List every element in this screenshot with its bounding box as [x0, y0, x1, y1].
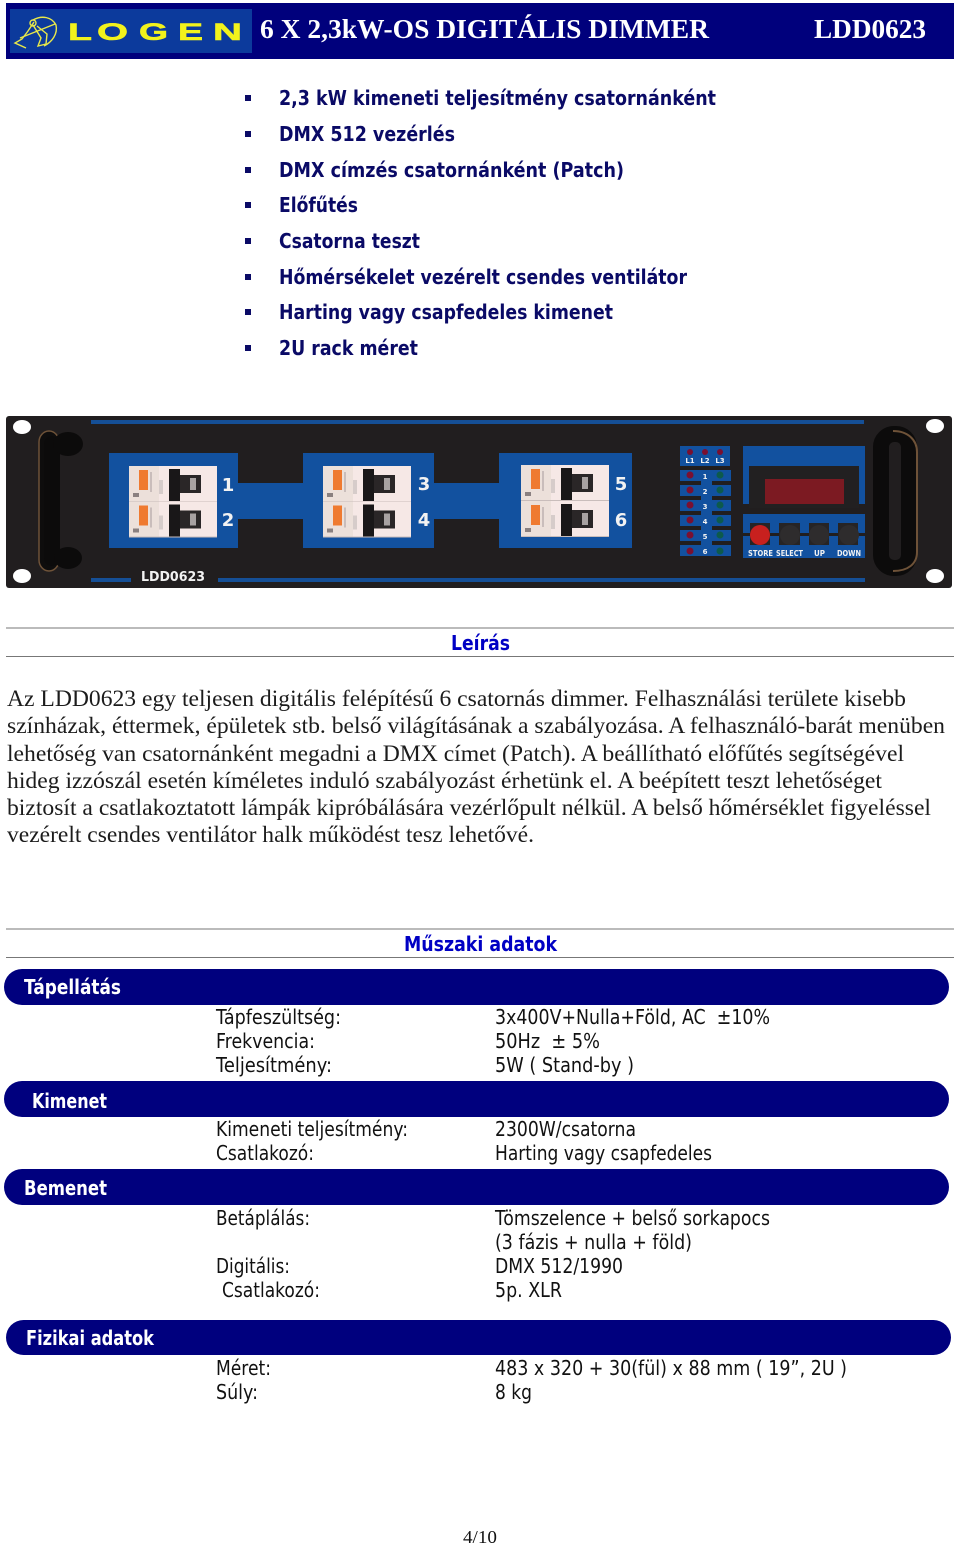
- section: description: [6, 628, 954, 847]
- control buttons: UP: [814, 549, 825, 558]
- product photo: dimmer front panel: [6, 416, 952, 588]
- spec group: input: Digitális:: [216, 1254, 290, 1278]
- spec group: input: [4, 1169, 949, 1302]
- spec group: output: [4, 1081, 949, 1165]
- spec group: power supply: Frekvencia:: [216, 1029, 315, 1053]
- spec group: output: Csatlakozó:: [216, 1141, 314, 1165]
- spec group: physical data: Súly:: [216, 1380, 258, 1404]
- spec group: output: Harting vagy csapfedeles: [495, 1141, 712, 1165]
- feature list: 2U rack méret: [279, 336, 418, 360]
- control buttons: [743, 514, 865, 558]
- LED indicators: L2: [700, 457, 710, 465]
- feature list: Hőmérsékelet vezérelt csendes ventilátor: [279, 265, 687, 289]
- spec group: power supply: [4, 969, 949, 1077]
- spec group: power supply: Teljesítmény:: [215, 1053, 332, 1077]
- feature list: [245, 86, 716, 360]
- channel numbers: 2: [222, 510, 234, 531]
- spec group: physical data: Méret:: [216, 1356, 271, 1380]
- control buttons: DOWN: [837, 549, 861, 558]
- feature list: Csatorna teszt: [279, 229, 420, 253]
- spec group: power supply: 5W ( Stand-by ): [495, 1053, 634, 1077]
- feature list: DMX 512 vezérlés: [279, 122, 455, 146]
- left handle: [39, 431, 83, 571]
- LED indicators: 5: [703, 533, 708, 541]
- model code: LDD0623: [814, 14, 926, 44]
- feature list: DMX címzés csatornánként (Patch): [279, 158, 624, 182]
- control buttons: SELECT: [776, 549, 803, 558]
- LED indicators: L1: [685, 457, 695, 465]
- spec group: input: Csatlakozó:: [222, 1278, 320, 1302]
- title: 6 X 2,3kW-OS DIGITÁLIS DIMMER: [260, 14, 710, 44]
- circuit breakers: [129, 465, 609, 538]
- spec group: power supply: Tápfeszültség:: [215, 1005, 341, 1029]
- description paragraph: Az LDD0623 egy teljesen digitális felépítésű 6 csatornás dimmer. Felhasználási területe kisebb: [7, 686, 906, 711]
- wordmark: N: [213, 19, 242, 46]
- blue stripes: [91, 420, 865, 582]
- wordmark: O: [97, 19, 128, 46]
- channel numbers: 3: [418, 474, 430, 495]
- wordmark: E: [178, 19, 203, 46]
- LED display: [743, 446, 865, 508]
- section: technical data heading: Műszaki adatok: [404, 932, 558, 956]
- logo: [10, 9, 252, 53]
- wordmark: [68, 19, 242, 46]
- spec group: output: 2300W/csatorna: [495, 1117, 636, 1141]
- spec group: physical data: Fizikai adatok: [26, 1326, 155, 1350]
- LED indicators: 2: [703, 488, 708, 496]
- model label: LDD0623: [141, 570, 205, 585]
- LED indicators: 6: [703, 548, 708, 556]
- heading: Leírás: [451, 631, 510, 655]
- channel numbers: 5: [615, 474, 627, 495]
- feature list: 2,3 kW kimeneti teljesítmény csatornánként: [279, 86, 716, 110]
- spec group: input: Bemenet: [24, 1176, 107, 1200]
- spec group: input: Tömszelence + belső sorkapocs: [494, 1206, 770, 1230]
- LED indicators: L3: [715, 457, 725, 465]
- LED indicators: [680, 446, 731, 556]
- spec group: physical data: 8 kg: [495, 1380, 532, 1404]
- description paragraph: [7, 686, 945, 847]
- spec group: output: Kimenet: [32, 1089, 107, 1113]
- spec group: physical data: 483 x 320 + 30(fül) x 88 mm ( 19”, 2U ): [495, 1356, 847, 1380]
- feature list: Előfűtés: [279, 193, 358, 217]
- channel numbers: 6: [615, 510, 627, 531]
- spec group: power supply: Tápellátás: [24, 975, 121, 999]
- blue breaker field: [109, 453, 632, 548]
- channel numbers: 1: [222, 475, 234, 496]
- channel numbers: 4: [418, 510, 430, 531]
- description paragraph: biztosít a csatlakoztatott lámpák kipróbálására vezérlőpult nélkül. A belső hőmérséklet figyeléssel: [7, 795, 931, 820]
- spec group: output: Kimeneti teljesítmény:: [216, 1117, 408, 1141]
- description paragraph: hideg izzószál esetén kíméletes induló szabályozást érhetünk el. A beépített teszt lehetőséget: [7, 768, 883, 793]
- spec group: input: DMX 512/1990: [495, 1254, 623, 1278]
- feature list: Harting vagy csapfedeles kimenet: [279, 300, 613, 324]
- channel numbers: [222, 474, 627, 531]
- spec group: input: Betáplálás:: [216, 1206, 310, 1230]
- spec group: input: (3 fázis + nulla + föld): [495, 1230, 692, 1254]
- description paragraph: vezérelt csendes ventilátor halk működést tesz lehetővé.: [7, 822, 534, 847]
- LED indicators: 4: [703, 518, 708, 526]
- spec group: power supply: 3x400V+Nulla+Föld, AC ±10%: [495, 1005, 770, 1029]
- spec group: physical data: [6, 1320, 951, 1404]
- spec group: input: 5p. XLR: [495, 1278, 562, 1302]
- LED indicators: 3: [703, 503, 708, 511]
- LED indicators: 1: [703, 473, 708, 481]
- wordmark: L: [68, 19, 92, 46]
- header band: [6, 3, 954, 59]
- control buttons: STORE: [748, 549, 773, 558]
- description paragraph: lehetőség van csatornánként megadni a DMX címet (Patch). A beállítható előfűtés segítségével: [7, 741, 904, 766]
- right handle: [881, 431, 917, 571]
- wordmark: G: [139, 19, 168, 46]
- description paragraph: színházak, éttermek, épületek stb. belső világításának a szabályozása. A felhasználó-barát menüben: [7, 713, 945, 738]
- spec group: power supply: 50Hz ± 5%: [495, 1029, 600, 1053]
- icon: archer: [15, 17, 56, 48]
